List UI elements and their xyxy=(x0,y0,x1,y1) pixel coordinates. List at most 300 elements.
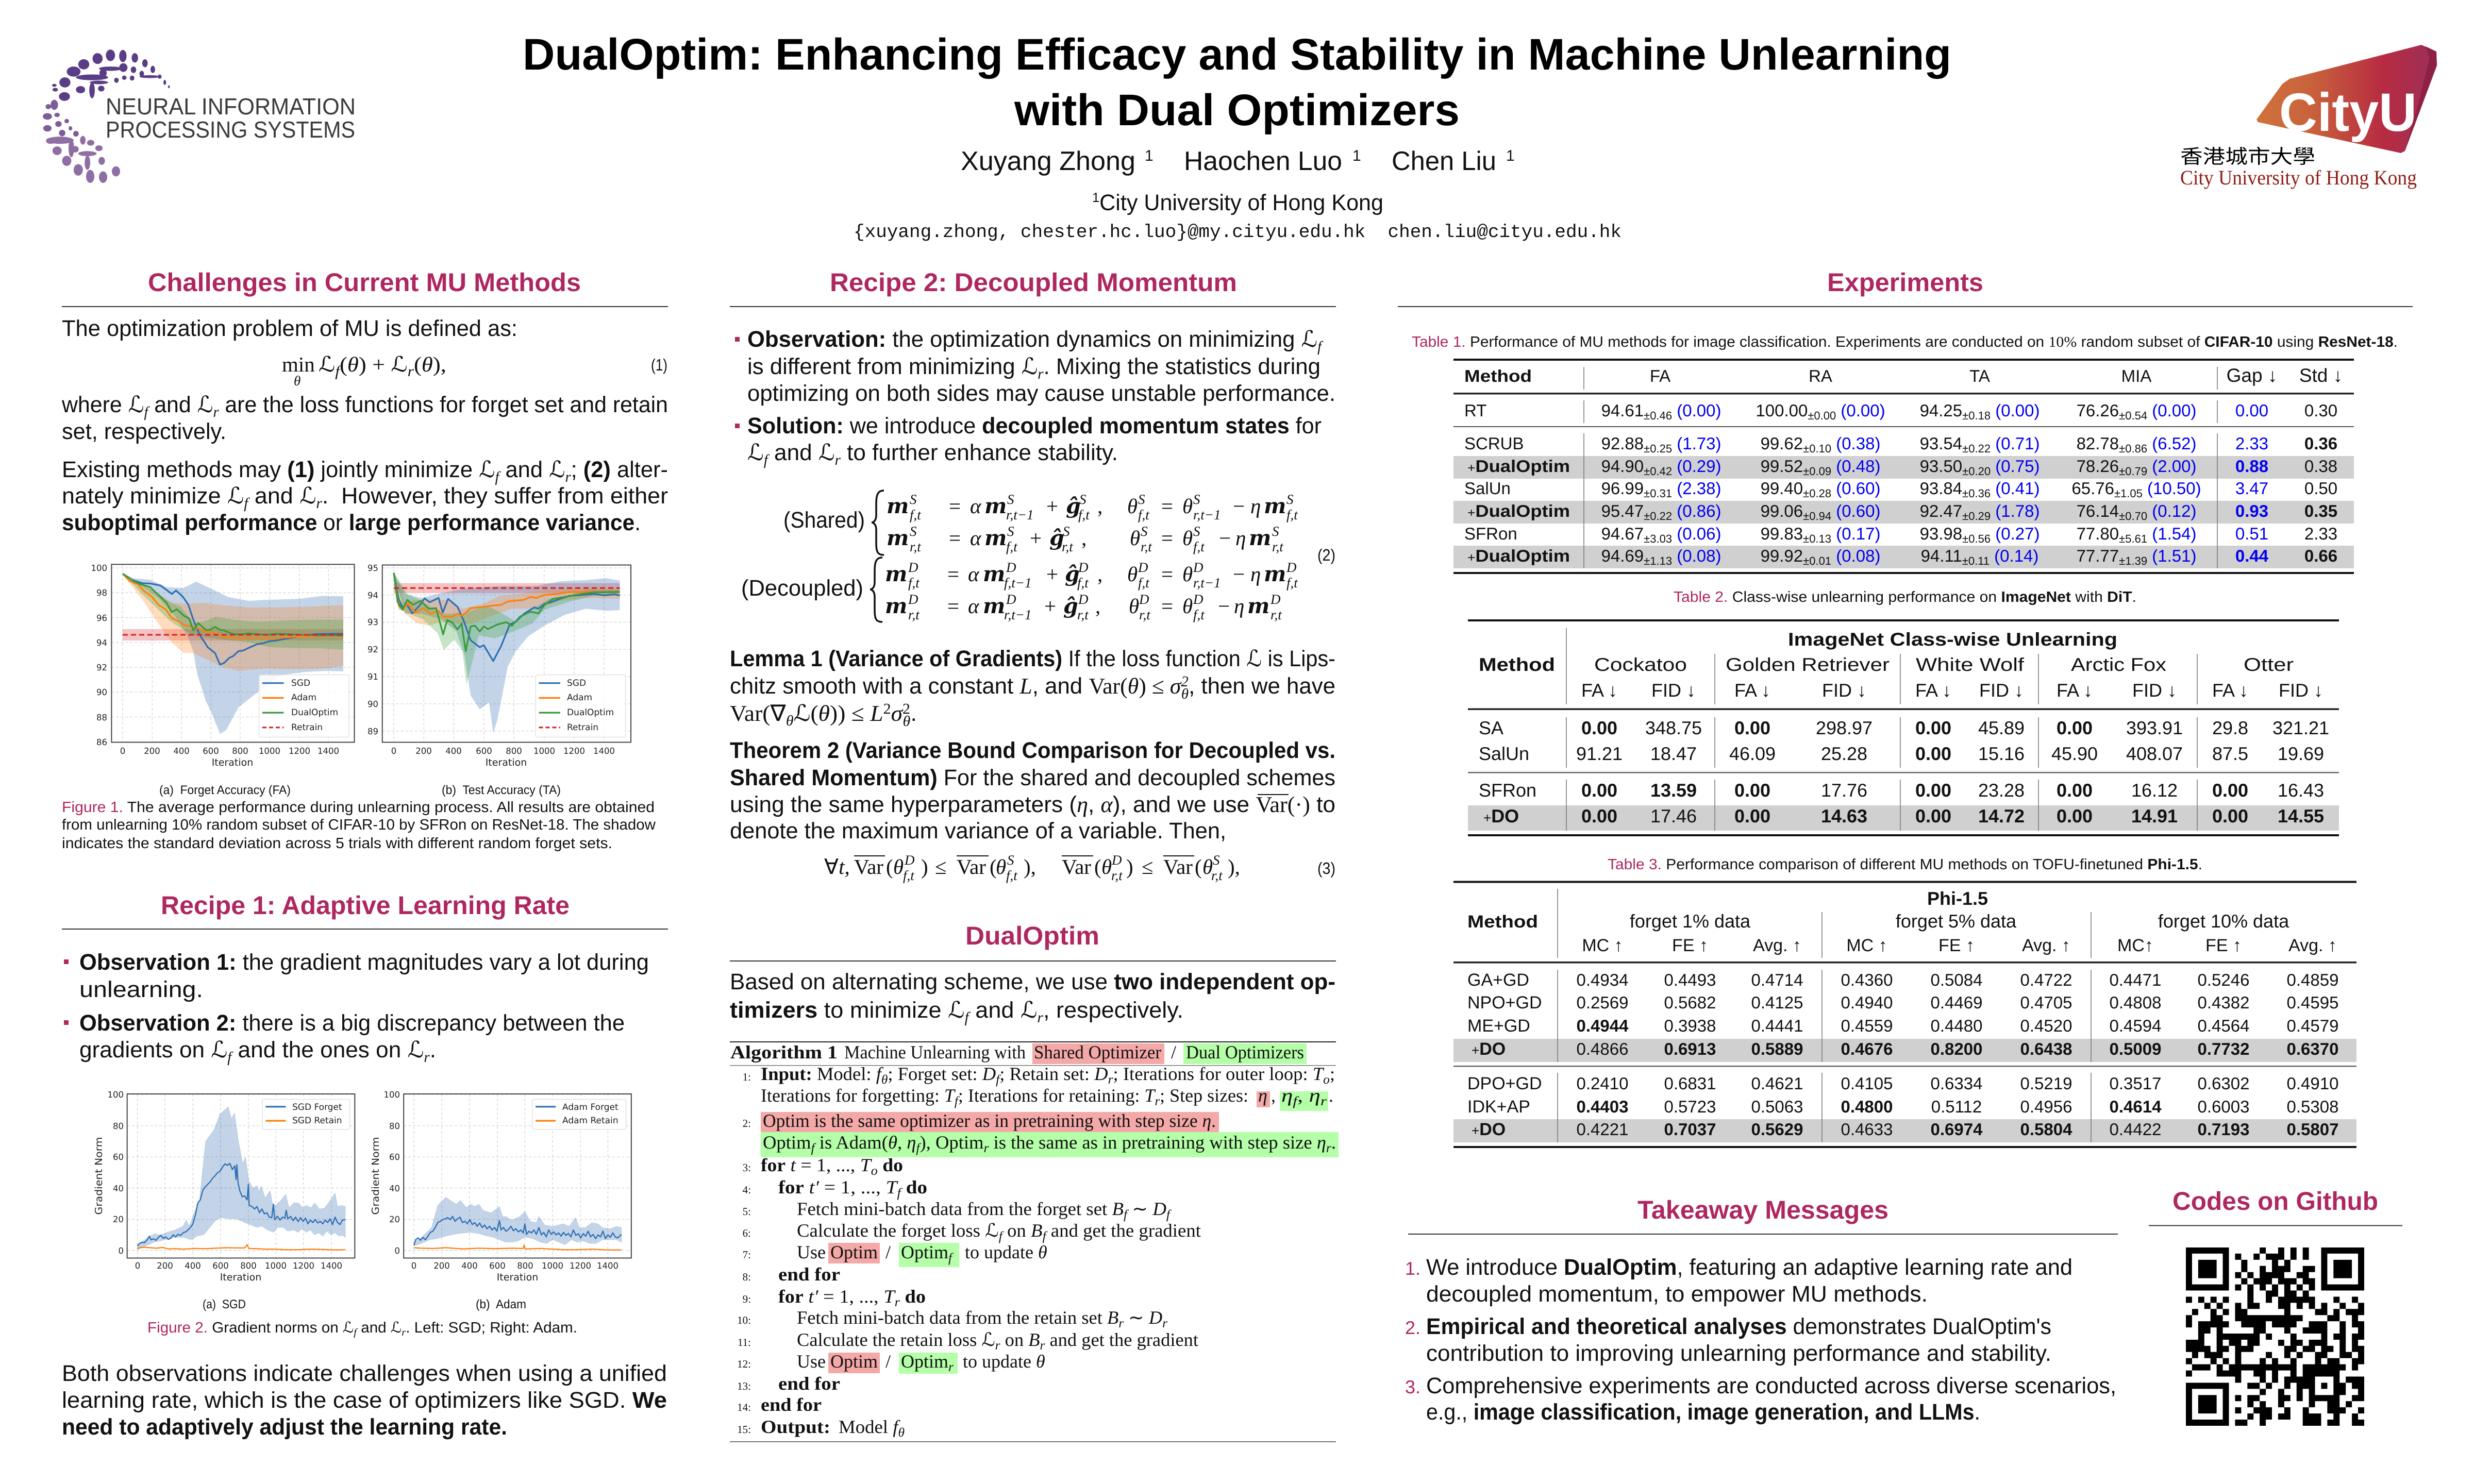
table 1: (0.00) xyxy=(1836,401,1885,420)
table 2 xyxy=(1468,619,2339,836)
equation 3: θ xyxy=(1202,855,1213,879)
chart: forget accuracy: 800 xyxy=(232,746,248,756)
table 2: 0.00 xyxy=(1915,805,1951,827)
equation 2: momentum updates: θ xyxy=(1182,594,1193,618)
equation 2: momentum updates: + xyxy=(1030,526,1042,550)
chart: forget accuracy: 400 xyxy=(173,746,190,756)
algorithm 1: Output: xyxy=(761,1416,830,1437)
table 1: 65.76 xyxy=(2071,479,2114,498)
text: observation 2: gradients on ℒ xyxy=(79,1037,227,1063)
algorithm 1: r xyxy=(1320,1094,1327,1108)
text: lemma 1: Var(∇ xyxy=(730,701,786,726)
algorithm 1: / xyxy=(885,1351,891,1372)
chart: SGD gradient norm: 1000 xyxy=(265,1261,287,1271)
table 3: MC↑ xyxy=(2117,936,2153,955)
table 3: 0.4595 xyxy=(2287,993,2338,1012)
table 3: 0.4221 xyxy=(1577,1120,1628,1139)
text: existing methods: (2) alter- xyxy=(583,457,668,482)
table 1: 99.62 xyxy=(1761,434,1803,453)
table 1: 76.26 xyxy=(2077,401,2119,420)
table 1: 77.77 xyxy=(2077,546,2119,565)
equation 2: momentum updates: m xyxy=(1247,594,1269,618)
algorithm 1: Fetch mini-batch data from the retain set B xyxy=(797,1307,1118,1328)
table 2: 14.91 xyxy=(2131,805,2178,827)
heading: takeaway: Takeaway Messages xyxy=(1637,1195,1888,1224)
chart: forget accuracy: 86 xyxy=(96,737,107,747)
chart: SGD gradient norm: (a) SGD xyxy=(203,1297,246,1311)
algorithm 1: B xyxy=(1028,1329,1040,1350)
table 3: 0.4940 xyxy=(1841,993,1893,1012)
text: loss definitions: ℒ xyxy=(197,392,213,418)
algorithm 1: D xyxy=(1152,1199,1166,1219)
chart: forget accuracy: (a) Forget Accuracy (FA) xyxy=(159,783,291,797)
algorithm 1: end for xyxy=(761,1394,822,1415)
algorithm 1: 6: xyxy=(743,1227,751,1239)
chart: Adam gradient norm: 100 xyxy=(383,1090,400,1100)
algorithm 1: 15: xyxy=(737,1423,751,1436)
caption: table 2: Table 2. Class-wise unlearning performance on ImageNet with DiT. xyxy=(1674,589,2136,605)
chart: Adam gradient norm: 1200 xyxy=(570,1261,591,1271)
text: dualoptim intro: and xyxy=(969,998,1021,1023)
table 1: RA xyxy=(1809,366,1832,385)
equation 2: momentum updates: θ xyxy=(1127,562,1138,586)
table 2: 14.63 xyxy=(1821,805,1867,827)
table 2: 19.69 xyxy=(2278,743,2324,764)
equation 1: (1) xyxy=(651,356,667,374)
equation 3: t, xyxy=(839,855,850,879)
text: loss definitions: f xyxy=(144,404,150,420)
table 1: (1.73) xyxy=(1672,434,1721,453)
equation 2: momentum updates: f,t−1 xyxy=(1004,575,1031,591)
chart: test accuracy: Retrain xyxy=(567,722,598,733)
equation 2: momentum updates: = xyxy=(1161,594,1173,618)
chart: test accuracy: 1200 xyxy=(563,746,585,756)
table 1: 78.26 xyxy=(2077,457,2119,476)
table 2: FA ↓ xyxy=(1734,680,1770,701)
chart: SGD gradient norm: 0 xyxy=(135,1261,140,1271)
heading: challenges: Challenges in Current MU Methods xyxy=(148,268,581,297)
logo: NeurIPS xyxy=(43,49,356,183)
table 1: ±0.11 xyxy=(1962,554,1990,567)
table 1: ±0.25 xyxy=(1644,442,1672,455)
table 1: 0.50 xyxy=(2304,479,2337,498)
algorithm 1: f xyxy=(999,1229,1004,1243)
algorithm 1: ; Step sizes: xyxy=(1160,1085,1248,1106)
chart: Adam gradient norm: Adam Retain xyxy=(562,1116,618,1126)
table 3: FE ↑ xyxy=(1672,936,1708,955)
table 2: White Wolf xyxy=(1916,654,2025,675)
table 2: +DO xyxy=(1483,805,1519,827)
text: existing methods: Existing methods may (1) jointly minimize ℒ xyxy=(62,457,495,483)
equation 2: momentum updates: r,t xyxy=(910,539,922,554)
table 2: Golden Retriever xyxy=(1726,654,1890,675)
panel: recipe 1 xyxy=(62,891,668,1440)
chart: Adam gradient norm: 80 xyxy=(389,1121,400,1131)
text: existing methods: suboptimal performance or large performance variance. xyxy=(62,510,641,535)
text: dualoptim intro: r xyxy=(1037,1009,1044,1026)
text: problem statement: The optimization problem of MU is defined as: xyxy=(62,316,517,341)
table 3: 0.5723 xyxy=(1664,1097,1716,1116)
table 3: 0.4808 xyxy=(2110,993,2161,1012)
caption: figure 2: r xyxy=(402,1327,406,1338)
algorithm 1: Optim is the same optimizer as in pretraining with step size η. xyxy=(763,1110,1216,1131)
caption: table 3: Table 3. Performance comparison of different MU methods on TOFU-finetuned Phi-1.5. xyxy=(1608,856,2202,873)
table 1: (0.41) xyxy=(1991,479,2040,498)
table 1: (0.12) xyxy=(2147,501,2196,520)
equation 1: ( xyxy=(340,352,347,376)
table 1: 82.78 xyxy=(2077,434,2119,453)
table 1: +DualOptim xyxy=(1467,546,1570,565)
heading: recipe 2: Recipe 2: Decoupled Momentum xyxy=(830,268,1237,297)
table 1: (10.50) xyxy=(2143,479,2201,498)
chart: test accuracy: 800 xyxy=(506,746,522,756)
table 3: ME+GD xyxy=(1467,1016,1530,1036)
algorithm 1: η xyxy=(1309,1085,1320,1106)
algorithm 1: Use xyxy=(797,1242,826,1262)
table 3: 0.4800 xyxy=(1841,1097,1893,1116)
table 3: 0.5112 xyxy=(1931,1097,1982,1116)
algorithm 1 xyxy=(730,1041,1339,1442)
table 3: 0.4910 xyxy=(2287,1074,2338,1093)
equation 3: f,t xyxy=(1006,868,1018,883)
table 3: +DO xyxy=(1472,1039,1506,1059)
table 3: 0.5807 xyxy=(2287,1120,2338,1139)
algorithm 1: r xyxy=(995,1339,1000,1353)
table 3: 0.4469 xyxy=(1931,993,1982,1012)
equation 3: Var xyxy=(957,855,986,879)
table 3: MC ↑ xyxy=(1846,936,1887,955)
table 2: 46.09 xyxy=(1729,743,1776,764)
chart: forget accuracy: 90 xyxy=(96,687,107,697)
takeaway 2: contribution to improving unlearning performance and stability. xyxy=(1426,1341,2051,1366)
table 3: 0.4621 xyxy=(1751,1074,1803,1093)
algorithm 1: to update xyxy=(963,1351,1036,1372)
caption: figure 2: . Left: SGD; Right: Adam. xyxy=(406,1320,577,1336)
equation 2: momentum updates: D xyxy=(1138,560,1148,575)
panel: experiments xyxy=(1398,268,2413,1148)
table 1: (0.00) xyxy=(2147,401,2196,420)
table 3: 0.5084 xyxy=(1931,970,1982,989)
table 1: ±0.31 xyxy=(1644,487,1672,500)
chart: test accuracy: Iteration xyxy=(486,757,527,768)
table 3: 0.6438 xyxy=(2020,1039,2072,1058)
table 3: Avg. ↑ xyxy=(1753,936,1801,955)
equation 2: momentum updates: θ xyxy=(1182,494,1193,518)
equation 2: momentum updates: α xyxy=(968,562,980,586)
algorithm 1: , xyxy=(1297,1085,1309,1106)
equation 3: r,t xyxy=(1211,868,1223,883)
table 1: ±0.54 xyxy=(2119,409,2147,422)
algorithm 1: is the same as in pretraining with step size xyxy=(989,1132,1317,1153)
algorithm 1: Dual Optimizers xyxy=(1186,1042,1304,1063)
table 3: 0.7732 xyxy=(2198,1039,2249,1058)
authors: Chen Liu xyxy=(1392,146,1496,176)
text: theorem 2: using the same hyperparameters (η, α), and we use Var(·) to xyxy=(730,792,1335,817)
table 1: +DualOptim xyxy=(1467,501,1570,520)
equation 3: ≤ xyxy=(935,855,947,879)
chart: SGD gradient norm: SGD Forget xyxy=(292,1102,342,1112)
table 3: 0.3938 xyxy=(1664,1016,1716,1035)
equation 1 xyxy=(282,352,667,389)
table 1: ±0.70 xyxy=(2119,510,2147,522)
text: existing methods: and xyxy=(499,457,549,482)
algorithm 1: r xyxy=(1162,1317,1167,1330)
affiliation: City University of Hong Kong xyxy=(1099,190,1383,215)
chart: Adam gradient norm: 0 xyxy=(411,1261,416,1271)
table 3: 0.4934 xyxy=(1577,970,1628,989)
table 3: 0.4441 xyxy=(1751,1016,1803,1035)
table 3: FE ↑ xyxy=(1938,936,1975,955)
algorithm 1: to update xyxy=(965,1242,1038,1262)
table 2: 16.43 xyxy=(2278,780,2324,801)
text: solution: Solution: we introduce decoupled momentum states for xyxy=(747,413,1322,439)
table 3: 0.6370 xyxy=(2287,1039,2338,1058)
text: lemma 1: 2 xyxy=(902,701,910,717)
table 2: 23.28 xyxy=(1978,780,2025,801)
table 2: FID ↓ xyxy=(2132,680,2177,701)
table 1: ±5.61 xyxy=(2119,532,2147,545)
table 3: 0.7193 xyxy=(2198,1120,2249,1139)
equation 2: momentum updates: η xyxy=(1250,562,1261,586)
equation 2: momentum updates: m xyxy=(887,494,909,518)
chart: forget accuracy: 88 xyxy=(96,713,107,722)
chart: SGD gradient norm: 40 xyxy=(113,1184,124,1193)
table 2: 18.47 xyxy=(1650,743,1697,764)
text: lemma 1: θ xyxy=(903,713,910,730)
table 3: 0.2410 xyxy=(1577,1074,1628,1093)
table 2: Method xyxy=(1479,654,1555,675)
chart: forget accuracy: 600 xyxy=(203,746,219,756)
equation 2: momentum updates: S xyxy=(1286,492,1294,507)
algorithm 1: 4: xyxy=(743,1184,751,1196)
algorithm 1: f xyxy=(1124,1208,1129,1222)
text: lemma 1: θ xyxy=(1181,686,1189,702)
algorithm 1: Model f xyxy=(839,1416,898,1437)
equation 1: θ), xyxy=(422,352,445,376)
algorithm 1: 1: xyxy=(743,1071,751,1083)
algorithm 1: r xyxy=(895,1295,900,1309)
caption: figure 1: Figure 1. The average performance during unlearning process. All results are obtained xyxy=(62,799,655,816)
table 2: 0.00 xyxy=(1581,780,1617,801)
takeaway 3 xyxy=(1405,1373,2116,1425)
chart: Adam gradient norm: 1000 xyxy=(542,1261,563,1271)
table 1: (0.29) xyxy=(1672,457,1721,476)
chart: test accuracy: 200 xyxy=(415,746,432,756)
chart: Adam gradient norm: Gradient Norm xyxy=(370,1137,381,1215)
equation 3: ( xyxy=(886,855,893,879)
text: observation: r xyxy=(1038,366,1044,382)
chart: test accuracy: 400 xyxy=(445,746,462,756)
table 2: 14.55 xyxy=(2278,805,2324,827)
text: lemma 1: 2 xyxy=(883,701,891,717)
algorithm 1: f xyxy=(948,1251,954,1265)
table 3: 0.4594 xyxy=(2110,1016,2161,1035)
text: solution: r xyxy=(835,452,841,468)
algorithm 1: end for xyxy=(778,1373,840,1394)
equation 2: momentum updates: f,t xyxy=(1193,539,1205,554)
text: observation 2: and the ones on xyxy=(231,1037,408,1063)
equation 2: momentum updates: m xyxy=(885,562,907,586)
table 3: 0.5009 xyxy=(2110,1039,2161,1058)
table 1: (0.86) xyxy=(1672,501,1721,520)
equation 2: momentum updates: θ xyxy=(1182,562,1193,586)
algorithm 1: Optim xyxy=(901,1242,948,1262)
algorithm 1: 3: xyxy=(743,1161,751,1174)
table 3: 0.6831 xyxy=(1664,1074,1716,1093)
table 1: (0.27) xyxy=(1991,524,2040,543)
table 2: FA ↓ xyxy=(2057,680,2093,701)
chart: SGD gradient norm: 200 xyxy=(157,1261,173,1271)
chart: SGD gradient norm: 0 xyxy=(119,1246,124,1256)
table 2: 29.8 xyxy=(2212,717,2248,738)
algorithm 1: Optim xyxy=(763,1132,810,1153)
equation 2: momentum updates: r,t xyxy=(1272,539,1284,554)
equation 2: momentum updates: , xyxy=(1097,562,1102,586)
table 1: ±0.22 xyxy=(1644,510,1672,522)
table 3: 0.4125 xyxy=(1751,993,1803,1012)
text: existing methods: f xyxy=(244,495,250,512)
algorithm 1: f xyxy=(811,1141,816,1155)
text: solution: f xyxy=(764,452,770,468)
algorithm 1: 7: xyxy=(743,1249,751,1261)
chart: forget accuracy: DualOptim xyxy=(291,707,338,718)
text: conclusion: Both observations indicate challenges when using a unified xyxy=(62,1361,667,1386)
table 2: Cockatoo xyxy=(1594,654,1687,675)
chart: Adam gradient norm xyxy=(370,1090,631,1311)
chart: Adam gradient norm: 800 xyxy=(517,1261,533,1271)
table 3: +DO xyxy=(1472,1120,1506,1139)
equation 3: (3) xyxy=(1317,859,1335,878)
algorithm 1: r xyxy=(984,1141,989,1155)
equation 2: momentum updates: θ xyxy=(1129,594,1139,618)
equation 2: momentum updates: = xyxy=(1161,562,1173,586)
table 1: 93.50 xyxy=(1920,457,1962,476)
table 2: 0.00 xyxy=(1734,780,1770,801)
algorithm 1: / xyxy=(1171,1042,1176,1063)
title: with Dual Optimizers xyxy=(1014,86,1460,135)
algorithm 1: o xyxy=(871,1164,878,1178)
equation 2: momentum updates: r,t xyxy=(908,607,920,622)
table 2: 13.59 xyxy=(1650,780,1697,801)
equation 2: momentum updates: η xyxy=(1250,494,1261,518)
text: loss definitions: are the loss functions for forget set and retain xyxy=(219,392,668,417)
table 2: SalUn xyxy=(1479,743,1529,764)
algorithm 1: 14: xyxy=(737,1401,751,1413)
chart: test accuracy: 95 xyxy=(367,563,378,573)
chart: SGD gradient norm: SGD Retain xyxy=(292,1116,342,1126)
table 1: 77.80 xyxy=(2077,524,2119,543)
caption: figure 2: and xyxy=(357,1320,391,1336)
equation 2: momentum updates: f,t xyxy=(1078,507,1090,522)
text: dualoptim intro: timizers to minimize ℒ xyxy=(730,997,964,1023)
chart: SGD gradient norm: 60 xyxy=(113,1152,124,1162)
algorithm 1: r xyxy=(1326,1141,1331,1155)
table 2: 0.00 xyxy=(2057,717,2093,738)
chart: Adam gradient norm: 600 xyxy=(489,1261,506,1271)
chart: test accuracy: 600 xyxy=(476,746,492,756)
table 1: 0.88 xyxy=(2235,457,2268,476)
emails: {xuyang.zhong, chester.hc.luo}@my.cityu.edu.hk chen.liu@cityu.edu.hk xyxy=(854,222,1622,243)
chart: Adam gradient norm: 200 xyxy=(433,1261,450,1271)
table 2: Otter xyxy=(2244,654,2294,675)
chart: forget accuracy: 98 xyxy=(96,588,107,598)
table 1: 93.54 xyxy=(1920,434,1962,453)
logo: NeurIPS: NEURAL INFORMATION xyxy=(106,93,356,120)
chart: forget accuracy: 1400 xyxy=(317,746,339,756)
table 2: FID ↓ xyxy=(2279,680,2323,701)
equation 2: momentum updates: S xyxy=(1007,492,1014,507)
table 2: SFRon xyxy=(1479,780,1536,801)
chart: Adam gradient norm: Adam Forget xyxy=(562,1102,618,1112)
table 2: 0.00 xyxy=(1915,780,1951,801)
algorithm 1: θ xyxy=(898,1426,905,1440)
equation 2: momentum updates: m xyxy=(887,526,909,550)
table 2: 17.46 xyxy=(1650,805,1697,827)
text: existing methods: r xyxy=(565,469,571,485)
table 2: FA ↓ xyxy=(2212,680,2248,701)
equation 2: momentum updates: , xyxy=(1095,594,1100,618)
chart: Adam gradient norm: 1400 xyxy=(597,1261,618,1271)
text: observation xyxy=(735,326,1335,406)
table 3: 0.4564 xyxy=(2198,1016,2249,1035)
table 3 xyxy=(1453,881,2356,1148)
algorithm 1: r xyxy=(1108,1073,1113,1087)
table 2: 25.28 xyxy=(1821,743,1867,764)
panel: challenges xyxy=(61,268,668,852)
text: loss definitions: r xyxy=(213,404,219,420)
chart: forget accuracy: 0 xyxy=(120,746,125,756)
table 1: ±0.10 xyxy=(1803,442,1831,455)
text: lemma 1: Lemma 1 (Variance of Gradients) If the loss function ℒ is Lips- xyxy=(730,646,1335,672)
table 1: ±0.22 xyxy=(1962,442,1991,455)
equation 3: ( xyxy=(990,855,997,879)
equation 2: momentum updates: S xyxy=(1141,524,1148,539)
table 1: ±0.09 xyxy=(1803,465,1831,478)
chart: forget accuracy xyxy=(91,563,355,797)
table 1: (0.08) xyxy=(1831,546,1880,565)
table 1: ±0.20 xyxy=(1962,465,1991,478)
equation 1: ℒ xyxy=(319,352,335,377)
caption: figure 1: indicates the standard deviation across 5 trials with different random forget sets. xyxy=(62,835,612,852)
text: lemma 1: σ xyxy=(891,701,904,726)
table 3: Avg. ↑ xyxy=(2288,936,2337,955)
table 1: ±0.01 xyxy=(1803,554,1831,567)
chart: SGD gradient norm: Gradient Norm xyxy=(93,1137,105,1215)
table 1: 0.35 xyxy=(2304,501,2337,520)
table 2: 45.90 xyxy=(2051,743,2098,764)
equation 2: momentum updates: f,t xyxy=(1077,575,1089,591)
algorithm 1: θ xyxy=(881,1073,888,1087)
table 2: 17.76 xyxy=(1821,780,1867,801)
table 1: 3.47 xyxy=(2235,479,2268,498)
table 2: 321.21 xyxy=(2272,717,2329,738)
table 2: FID ↓ xyxy=(1979,680,2024,701)
table 2: FID ↓ xyxy=(1822,680,1866,701)
table 1: 0.00 xyxy=(2235,401,2268,420)
table 3: forget 1% data xyxy=(1630,910,1751,932)
equation 2: momentum updates: f,t xyxy=(1138,575,1150,591)
table 2: 0.00 xyxy=(1581,805,1617,827)
table 3: 0.4520 xyxy=(2020,1016,2072,1035)
table 1: (2.00) xyxy=(2147,457,2196,476)
table 3: 0.5063 xyxy=(1751,1097,1803,1116)
table 3: 0.4859 xyxy=(2287,970,2338,989)
table 3: GA+GD xyxy=(1467,970,1529,990)
authors: 1 xyxy=(1506,147,1515,164)
table 2: 0.00 xyxy=(2212,805,2248,827)
equation 3: ∀ xyxy=(824,855,839,879)
chart: Adam gradient norm: 20 xyxy=(389,1215,400,1224)
